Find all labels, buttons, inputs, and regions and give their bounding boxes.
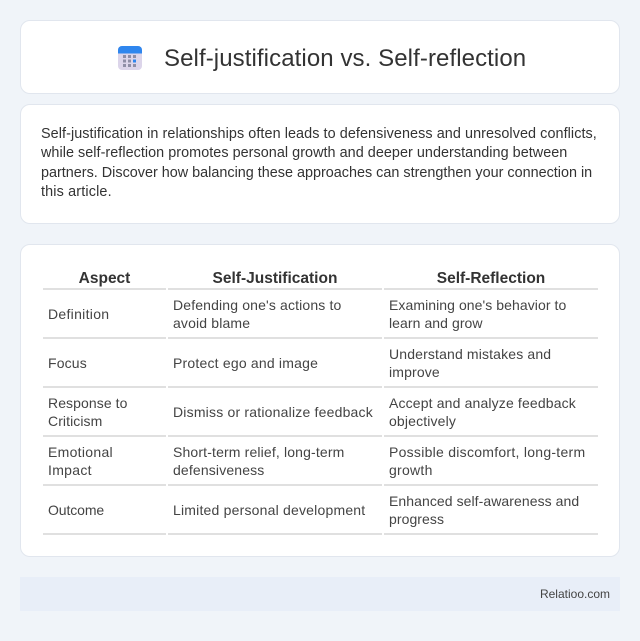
footer text: Relatioo.com [540,587,610,601]
title: Self-justification vs. Self-reflection [164,45,526,72]
comparison table: Enhanced self-awareness and [389,493,579,509]
comparison table: learn and grow [389,315,483,331]
comparison table: Possible discomfort, long-term [389,444,585,460]
panel: comparison table card [20,244,620,557]
comparison table: improve [389,364,440,380]
comparison table: Defending one's actions to [173,297,341,313]
comparison table: Protect ego and image [173,355,318,371]
comparison table: Focus [48,355,87,371]
intro text: while self-reflection promotes personal growth and deeper understanding between [41,145,567,161]
comparison table: Outcome [48,502,104,518]
comparison table: Definition [48,306,109,322]
comparison table: Short-term relief, long-term [173,444,344,460]
comparison table: Understand mistakes and [389,346,551,362]
comparison table: Response to [48,395,128,411]
comparison table: growth [389,462,433,478]
icon: calendar [118,46,142,70]
panel: title card [20,20,620,94]
intro text [41,126,597,200]
intro text: Self-justification in relationships often leads to defensiveness and unresolved conflicts, [41,126,597,142]
comparison table: Examining one's behavior to [389,297,566,313]
header: Aspect: Aspect [79,270,130,286]
intro text: partners. Discover how balancing these approaches can strengthen your connection in [41,165,592,181]
intro text: this article. [41,184,112,200]
footer bar [20,577,620,611]
header: Self-Reflection: Self-Reflection [437,270,545,286]
comparison table: defensiveness [173,462,264,478]
comparison table: Impact [48,462,92,478]
comparison table: Emotional [48,444,113,460]
comparison table: Dismiss or rationalize feedback [173,404,373,420]
comparison table: progress [389,511,444,527]
comparison table: Accept and analyze feedback [389,395,576,411]
comparison table: objectively [389,413,456,429]
header: Self-Justification: Self-Justification [213,270,337,286]
comparison table: avoid blame [173,315,250,331]
comparison table: Limited personal development [173,502,365,518]
panel: intro card [20,104,620,224]
comparison table: Criticism [48,413,102,429]
comparison table [43,270,598,535]
